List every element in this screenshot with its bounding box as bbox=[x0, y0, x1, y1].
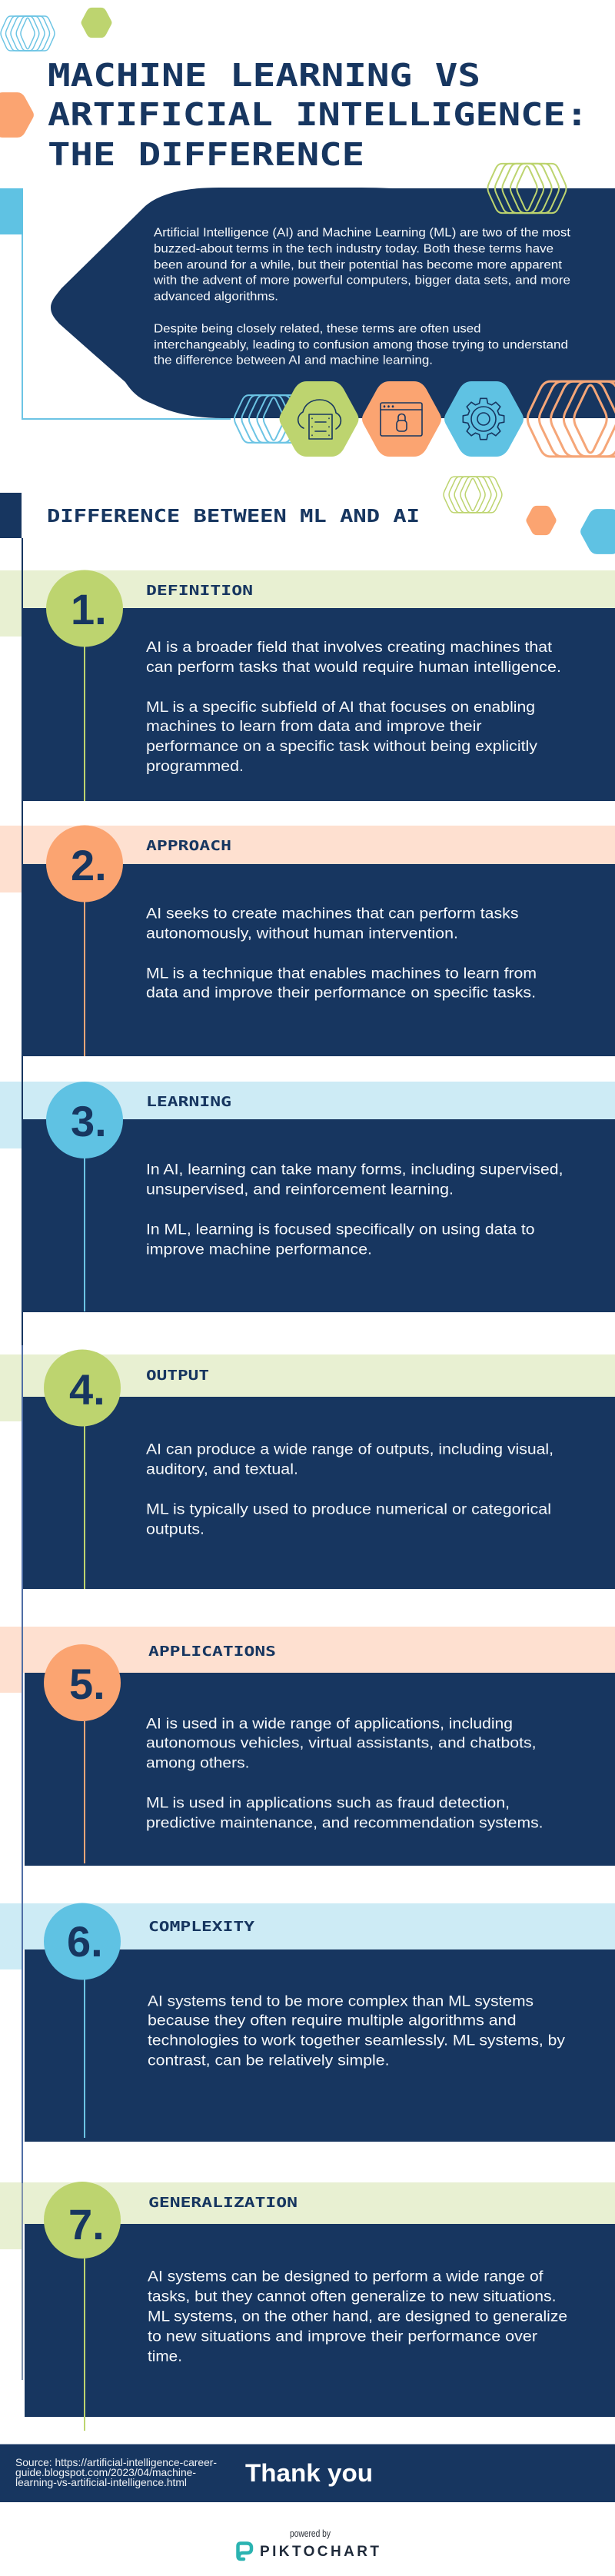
label: complexity: COMPLEXITY bbox=[148, 1919, 254, 1935]
section heading bbox=[0, 493, 420, 538]
text: learning: unsupervised, and reinforcement learning. bbox=[146, 1181, 454, 1198]
label: definition: DEFINITION bbox=[146, 583, 253, 599]
text: approach: AI seeks to create machines that can perform tasks bbox=[146, 906, 519, 922]
text: approach: data and improve their performance on specific tasks. bbox=[146, 984, 536, 1001]
text: complexity bbox=[148, 1993, 565, 2069]
source citation bbox=[15, 2456, 217, 2488]
text: generalization: ML systems, on the other hand, are designed to generalize bbox=[148, 2308, 567, 2325]
text: generalization: AI systems can be designed to perform a wide range of bbox=[148, 2268, 544, 2285]
icon: gear bbox=[444, 381, 524, 457]
text: definition bbox=[146, 639, 561, 775]
number 6: 6. bbox=[67, 1917, 103, 1966]
decorative outline: green, intro top right bbox=[487, 164, 567, 213]
source citation: guide.blogspot.com/2023/04/machine- bbox=[15, 2466, 196, 2478]
label: approach: APPROACH bbox=[146, 838, 231, 854]
panel: 1 definition bbox=[0, 570, 615, 801]
blue accent tab and outline bbox=[0, 188, 231, 419]
icon: cloud server bbox=[280, 381, 358, 457]
number 7: 7. bbox=[68, 2200, 105, 2249]
thank you: Thank you bbox=[245, 2459, 373, 2487]
text: learning bbox=[146, 1161, 563, 1258]
panel: 4 output bbox=[0, 1350, 615, 1589]
text: learning: In ML, learning is focused specifically on using data to bbox=[146, 1221, 535, 1238]
left timeline rule bbox=[22, 538, 23, 2380]
text: generalization bbox=[148, 2268, 567, 2365]
text: complexity: technologies to work together seamlessly. ML systems, by bbox=[148, 2033, 565, 2049]
text: definition: machines to learn from data and improve their bbox=[146, 718, 482, 735]
number 3: 3. bbox=[71, 1097, 107, 1145]
text: definition: can perform tasks that would require human intelligence. bbox=[146, 659, 561, 676]
text: output: AI can produce a wide range of outputs, including visual, bbox=[146, 1441, 554, 1458]
text: generalization: to new situations and improve their performance over bbox=[148, 2328, 538, 2345]
decorative hexagon cluster: top left bbox=[0, 8, 111, 138]
text: output: ML is typically used to produce numerical or categorical bbox=[146, 1501, 551, 1517]
panel: 5 applications bbox=[0, 1627, 615, 1866]
label: output: OUTPUT bbox=[146, 1368, 209, 1384]
intro text: advanced algorithms. bbox=[154, 291, 278, 303]
source citation: Source: https://artificial-intelligence-career- bbox=[15, 2456, 217, 2468]
panel: 6 complexity bbox=[0, 1903, 615, 2142]
intro text: Despite being closely related, these terms are often used bbox=[154, 323, 481, 335]
intro text: the difference between AI and machine learning. bbox=[154, 354, 433, 367]
text: learning: improve machine performance. bbox=[146, 1241, 372, 1258]
panel: 2 approach bbox=[0, 826, 615, 1056]
decorative hexagons right of heading bbox=[444, 477, 615, 554]
label: learning: LEARNING bbox=[146, 1094, 231, 1110]
section heading: DIFFERENCE BETWEEN ML AND AI bbox=[47, 505, 420, 527]
intro text: interchangeably, leading to confusion among those trying to understand bbox=[154, 338, 568, 352]
intro panel bbox=[51, 188, 615, 418]
text: applications: ML is used in applications such as fraud detection, bbox=[146, 1794, 510, 1811]
footer band bbox=[0, 2444, 615, 2502]
decorative outline: blue, behind icons bbox=[234, 395, 313, 443]
title: THE DIFFERENCE bbox=[48, 136, 364, 173]
icon: piktochart logo bbox=[238, 2543, 251, 2559]
intro text bbox=[153, 226, 571, 367]
text: applications: predictive maintenance, and recommendation systems. bbox=[146, 1814, 543, 1831]
text: definition: programmed. bbox=[146, 758, 244, 775]
label: applications: APPLICATIONS bbox=[148, 1644, 276, 1660]
decorative outline: orange, right edge bbox=[527, 381, 615, 457]
text: complexity: because they often require multiple algorithms and bbox=[148, 2013, 517, 2029]
text: approach: ML is a technique that enables machines to learn from bbox=[146, 966, 537, 982]
text: output bbox=[146, 1441, 554, 1537]
title bbox=[48, 57, 588, 173]
intro text: Artificial Intelligence (AI) and Machine Learning (ML) are two of the most bbox=[154, 226, 571, 240]
text: complexity: contrast, can be relatively simple. bbox=[148, 2052, 389, 2069]
text: applications: autonomous vehicles, virtual assistants, and chatbots, bbox=[146, 1734, 537, 1751]
number 5: 5. bbox=[69, 1660, 105, 1708]
title: ARTIFICIAL INTELLIGENCE: bbox=[48, 96, 588, 133]
number 4: 4. bbox=[69, 1365, 105, 1414]
text: approach bbox=[146, 906, 537, 1001]
text: complexity: AI systems tend to be more complex than ML systems bbox=[148, 1993, 534, 2009]
title: MACHINE LEARNING VS bbox=[48, 57, 480, 94]
text: output: auditory, and textual. bbox=[146, 1461, 298, 1477]
text: approach: autonomously, without human intervention. bbox=[146, 926, 458, 942]
label: generalization: GENERALIZATION bbox=[148, 2195, 298, 2211]
text: definition: performance on a specific task without being explicitly bbox=[146, 738, 537, 755]
icon: browser lock bbox=[362, 381, 441, 457]
text: definition: ML is a specific subfield of AI that focuses on enabling bbox=[146, 699, 535, 716]
intro text: buzzed-about terms in the tech industry today. Both these terms have bbox=[154, 243, 554, 255]
number 1: 1. bbox=[71, 585, 107, 633]
piktochart branding: PIKTOCHART bbox=[260, 2544, 379, 2560]
panel: 7 generalization bbox=[0, 2182, 615, 2431]
source citation: learning-vs-artificial-intelligence.html bbox=[15, 2476, 187, 2488]
text: generalization: tasks, but they cannot often generalize to new situations. bbox=[148, 2288, 557, 2305]
text: applications bbox=[146, 1716, 543, 1831]
text: applications: among others. bbox=[146, 1754, 249, 1771]
piktochart branding bbox=[238, 2528, 379, 2560]
panel: 3 learning bbox=[0, 1082, 615, 1312]
text: learning: In AI, learning can take many forms, including supervised, bbox=[146, 1161, 563, 1178]
text: applications: AI is used in a wide range of applications, including bbox=[146, 1716, 513, 1733]
text: output: outputs. bbox=[146, 1521, 204, 1537]
intro text: with the advent of more powerful computers, bigger data sets, and more bbox=[153, 274, 570, 288]
number 2: 2. bbox=[71, 841, 107, 889]
intro text: been around for a while, but their potential has become more apparent bbox=[154, 258, 563, 272]
piktochart branding: powered by bbox=[290, 2528, 331, 2539]
text: definition: AI is a broader field that involves creating machines that bbox=[146, 639, 553, 656]
text: generalization: time. bbox=[148, 2348, 182, 2365]
